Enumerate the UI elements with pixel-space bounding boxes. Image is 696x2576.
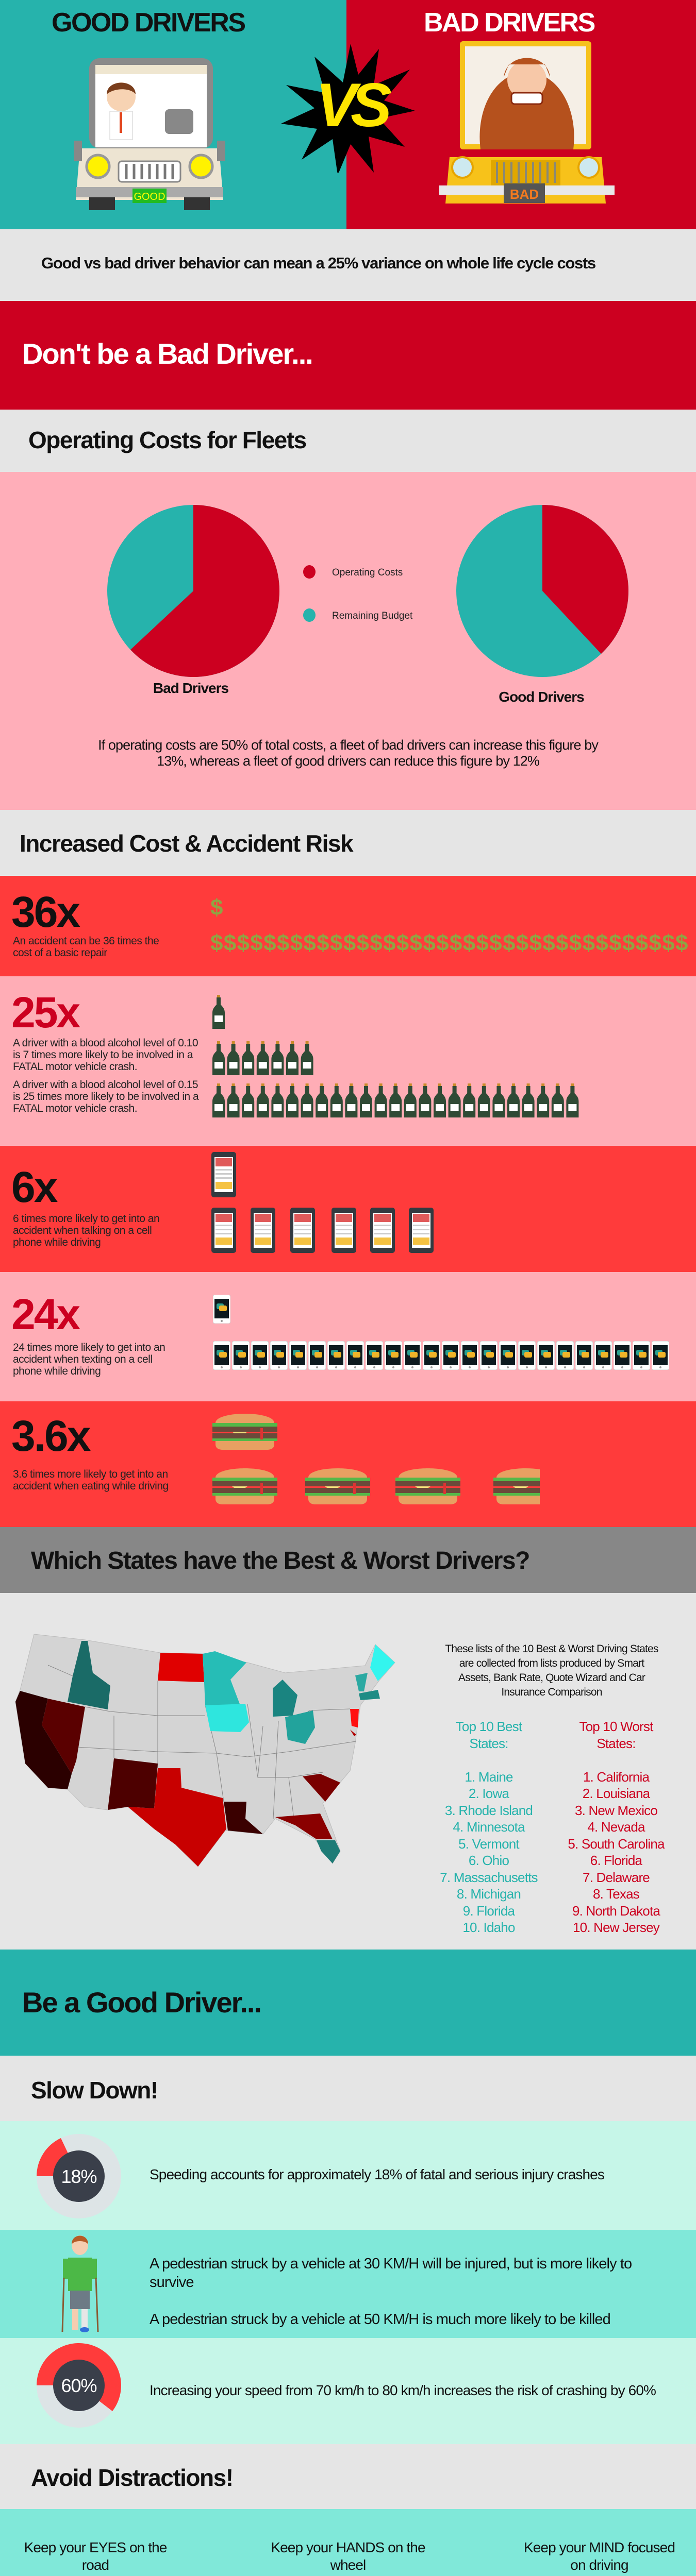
- panel: 36x: [0, 876, 696, 976]
- text: speeding: Speeding accounts for approximately 18% of fatal and serious injury crashes: [150, 2166, 604, 2182]
- icon: dollars: [210, 895, 689, 956]
- heading: don't be a bad driver: Don't be a Bad Driver...: [22, 337, 312, 370]
- stat: 6x: 6x: [11, 1163, 56, 1211]
- tip: hands: wheel: [330, 2557, 366, 2573]
- list: top 10 worst: 2. Louisiana: [583, 1786, 650, 1801]
- tip: eyes: road: [82, 2557, 109, 2573]
- list: top 10 best: 7. Massachusetts: [440, 1869, 538, 1885]
- text: pedestrian stats: A pedestrian struck by a vehicle at 30 KM/H will be injured, but is more likely to: [150, 2256, 632, 2272]
- list: top 10 best: 3. Rhode Island: [445, 1802, 533, 1818]
- text: 25x: A driver with a blood alcohol level of 0.10 is 7 times more likely to be involved in a FATAL motor vehicle crash.: [13, 1037, 198, 1073]
- icon: vs splat: [281, 44, 415, 173]
- stat: 25x: 25x: [11, 988, 79, 1037]
- text block: operating cost explanation: 13%, whereas a fleet of good drivers can reduce this figure by 12%: [157, 753, 539, 769]
- heading: avoid distractions: [0, 2444, 696, 2509]
- icon: burgers: [212, 1414, 540, 1504]
- panel: 25x: [0, 976, 696, 1146]
- legend: Remaining Budget: [332, 611, 413, 621]
- icon: bottles: [212, 995, 578, 1117]
- list: top 10 worst: 9. North Dakota: [572, 1903, 660, 1919]
- text: 6x: 6 times more likely to get into an accident when talking on a cell phone while driving: [13, 1213, 159, 1248]
- list: top 10 best: 10. Idaho: [462, 1920, 515, 1935]
- heading: increased cost & accident risk: Increased Cost & Accident Risk: [20, 830, 353, 857]
- list: top 10 best: 6. Ohio: [469, 1853, 509, 1868]
- icon: good car: [74, 58, 225, 210]
- stat: 36x: 36x: [11, 888, 79, 936]
- heading: slow down: Slow Down!: [31, 2077, 158, 2104]
- header: good vs bad drivers: [0, 0, 696, 229]
- tip: eyes: Keep your EYES on the: [24, 2539, 167, 2555]
- heading: operating costs: [0, 410, 696, 472]
- heading: be a good driver: [0, 1950, 696, 2056]
- panel: operating costs pies: [0, 472, 696, 810]
- text: pedestrian stats: survive A pedestrian struck by a vehicle at 50 KM/H is much more likely to be killed: [150, 2274, 610, 2328]
- stat: 3.6x: 3.6x: [11, 1412, 90, 1460]
- legend: [303, 565, 413, 622]
- text block: variance note: [0, 229, 696, 301]
- icon: bad car: [439, 41, 615, 204]
- list: top 10 best: 4. Minnesota: [453, 1819, 525, 1835]
- panel: states: [0, 1593, 696, 1950]
- heading: avoid distractions: Avoid Distractions!: [31, 2464, 233, 2491]
- text block: variance note: Good vs bad driver behavior can mean a 25% variance on whole life cycle costs: [41, 254, 595, 272]
- icon: vs splat: VS: [316, 71, 391, 140]
- pie: bad drivers: [107, 505, 279, 696]
- icon: phones: [211, 1152, 434, 1253]
- icon: boy on crutches: [62, 2235, 99, 2332]
- heading: increased cost & accident risk: [0, 810, 696, 876]
- icon: dollars: $: [210, 895, 224, 920]
- text: 3.6x: 3.6 times more likely to get into an accident when eating while driving: [13, 1468, 169, 1492]
- heading: slow down: [0, 2056, 696, 2121]
- list: top 10 worst: 3. New Mexico: [575, 1802, 657, 1818]
- pie: good drivers: [456, 505, 628, 705]
- heading: bad drivers: BAD DRIVERS: [424, 8, 594, 38]
- heading: good drivers: GOOD DRIVERS: [52, 8, 244, 38]
- list: top 10 best: 5. Vermont: [458, 1836, 519, 1852]
- icon: texting phones: [213, 1295, 669, 1370]
- chart: 18% donut: [37, 2134, 121, 2218]
- heading: best & worst states: Which States have the Best & Worst Drivers?: [31, 1547, 529, 1574]
- text block: operating cost explanation: If operating costs are 50% of total costs, a fleet of bad drivers can increase this figure by: [98, 737, 598, 753]
- heading: best & worst states: [0, 1527, 696, 1593]
- tip: hands: [271, 2539, 425, 2573]
- list: top 10 worst: 4. Nevada: [587, 1819, 645, 1835]
- icon: dollars: $$$$$$$$$$$$$$$$$$$$$$$$$$$$$$$$$$$$: [210, 930, 689, 956]
- panel: 3.6x: [0, 1401, 696, 1527]
- text block: operating cost explanation: [98, 737, 599, 769]
- pie: bad drivers: Bad Drivers: [153, 680, 229, 696]
- text: 25x: A driver with a blood alcohol level of 0.15 is 25 times more likely to be involved in a FATAL motor vehicle crash.: [13, 1079, 198, 1114]
- list: top 10 worst: 8. Texas: [593, 1886, 639, 1902]
- pie: good drivers: Good Drivers: [499, 689, 584, 705]
- text block: sources note: These lists of the 10 Best & Worst Driving States are collected from lists produced by Smart Assets, Bank Rate, Quote Wizard and Car Insurance Comparison: [445, 1643, 658, 1698]
- icon: good car: GOOD: [134, 191, 165, 202]
- panel: 18% speeding: [0, 2121, 696, 2230]
- list: top 10 worst: 1. California: [583, 1769, 649, 1785]
- list: top 10 worst: 7. Delaware: [583, 1869, 650, 1885]
- map: usa: [15, 1634, 395, 1867]
- chart: pies: [107, 505, 628, 705]
- list: top 10 best: [440, 1719, 538, 1935]
- panel: pedestrian: [0, 2230, 696, 2338]
- panel: 6x: [0, 1146, 696, 1272]
- list: top 10 best: 2. Iowa: [469, 1786, 509, 1801]
- list: top 10 worst: 5. South Carolina: [568, 1836, 665, 1852]
- icon: bad car: BAD: [510, 187, 539, 202]
- tip: eyes: [24, 2539, 167, 2573]
- tip: mind: [524, 2539, 675, 2573]
- stat: 24x: 24x: [11, 1290, 79, 1338]
- list: top 10 best: 1. Maine: [465, 1769, 513, 1785]
- legend: Operating Costs: [332, 567, 403, 578]
- panel: good drivers: [0, 0, 346, 229]
- chart: 60% donut: [37, 2343, 121, 2428]
- text: 36x: An accident can be 36 times the cost of a basic repair: [13, 935, 159, 959]
- heading: operating costs: Operating Costs for Fleets: [28, 427, 306, 453]
- tip: mind: Keep your MIND focused: [524, 2539, 675, 2555]
- list: top 10 best: 8. Michigan: [457, 1886, 521, 1902]
- tip: mind: on driving: [570, 2557, 628, 2573]
- list: top 10 best: States:: [469, 1735, 508, 1751]
- list: top 10 worst: [568, 1719, 665, 1935]
- text: speed increase: Increasing your speed from 70 km/h to 80 km/h increases the risk of crashing by 60%: [150, 2382, 656, 2398]
- chart: 18% donut: 18%: [61, 2166, 97, 2187]
- list: top 10 worst: 10. New Jersey: [573, 1920, 659, 1935]
- list: top 10 worst: 6. Florida: [590, 1853, 642, 1868]
- list: top 10 worst: Top 10 Worst: [579, 1719, 653, 1734]
- heading: be a good driver: Be a Good Driver...: [22, 1986, 261, 2019]
- list: top 10 worst: States:: [596, 1735, 636, 1751]
- panel: bad drivers: [346, 0, 696, 229]
- tip: hands: Keep your HANDS on the: [271, 2539, 425, 2555]
- list: top 10 best: Top 10 Best: [456, 1719, 522, 1734]
- list: top 10 best: 9. Florida: [463, 1903, 515, 1919]
- panel: 60% speed: [0, 2338, 696, 2444]
- panel: 24x: [0, 1272, 696, 1401]
- heading: don't be a bad driver: [0, 301, 696, 410]
- chart: 60% donut: 60%: [61, 2375, 97, 2396]
- text: 24x: 24 times more likely to get into an accident when texting on a cell phone while driving: [13, 1342, 165, 1377]
- text: 25x: [13, 1037, 199, 1114]
- panel: distraction tips: [0, 2509, 696, 2576]
